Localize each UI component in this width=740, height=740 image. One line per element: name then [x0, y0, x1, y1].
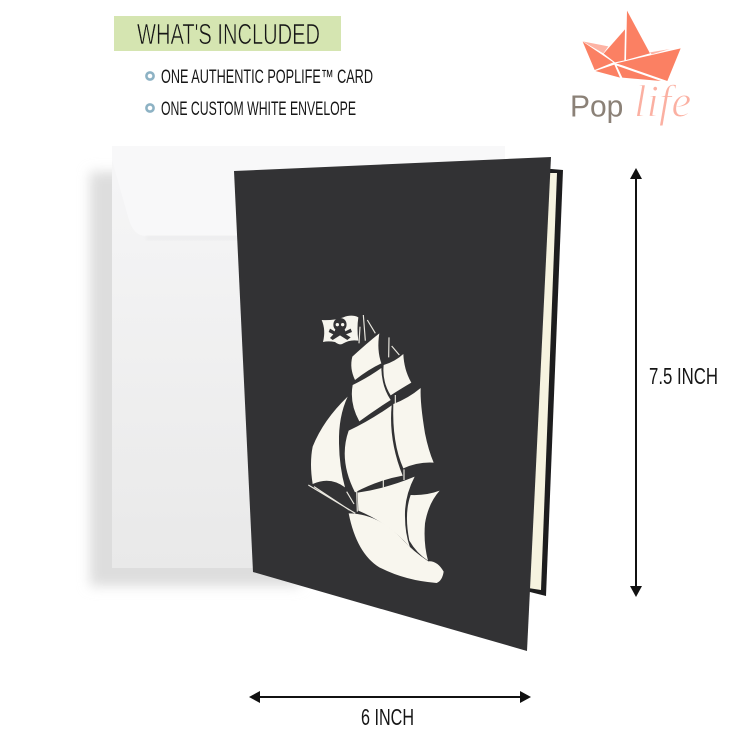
envelope flap	[112, 146, 505, 236]
pop-up card	[234, 157, 563, 651]
arrow: height	[630, 168, 642, 597]
envelope	[90, 146, 505, 586]
illustration: pirate ship	[308, 315, 444, 583]
text: life: life	[634, 77, 691, 127]
text: authentic card: ONE AUTHENTIC POPLIFE™ CARD	[161, 67, 373, 88]
text: Pop: Pop	[570, 90, 623, 124]
rigging	[308, 315, 404, 513]
icon: paper boat	[583, 11, 681, 81]
arrow: width	[249, 691, 531, 703]
heading: what's included: WHAT'S INCLUDED	[137, 19, 320, 51]
card front	[234, 157, 551, 651]
heading: what's included	[114, 16, 341, 51]
logo: poplife	[570, 11, 691, 127]
envelope shadow	[90, 172, 300, 586]
text: white envelope: ONE CUSTOM WHITE ENVELOPE	[161, 99, 356, 120]
sails	[311, 333, 444, 583]
envelope body	[112, 146, 505, 568]
list: included items	[146, 67, 373, 120]
flag with skull	[322, 316, 358, 344]
label: 6 inch: 6 INCH	[361, 704, 414, 730]
card back and inner page	[522, 168, 563, 596]
icon: bullet two	[146, 104, 154, 112]
icon: bullet one	[146, 72, 154, 80]
